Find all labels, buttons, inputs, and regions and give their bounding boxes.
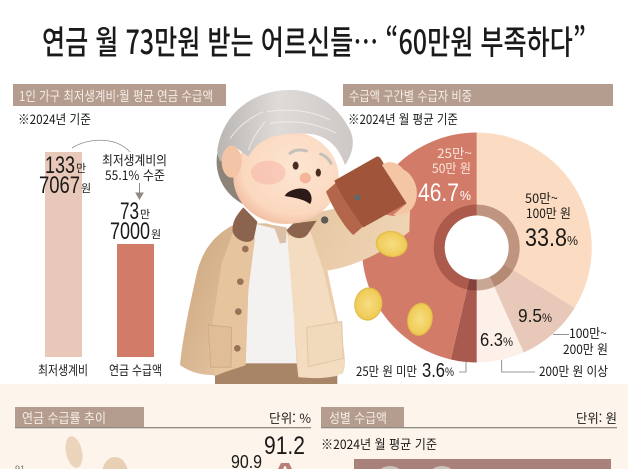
note: 2024 monthly average: ※2024년 월 평균 기준: [321, 434, 437, 453]
heading: by gender: 성별 수급액: [329, 407, 387, 427]
label: under 25 bracket 3.6%: %: [445, 365, 454, 379]
unit label: 단위: 원: [576, 408, 617, 427]
label: 25-50 46.7%: %: [460, 188, 471, 203]
jacket snap: [321, 216, 328, 224]
coin: [374, 228, 410, 260]
wallet back flap: [326, 183, 367, 235]
hair strands: [230, 110, 337, 150]
icon: elderly person holding an empty wallet: [180, 90, 436, 384]
label: under 25 bracket 3.6%: 3.6: [422, 360, 445, 382]
label: 100-200 bracket: 200만 원: [563, 339, 608, 358]
icon: person head: [377, 466, 403, 469]
panel: share of recipients by amount: [343, 84, 613, 382]
value: 133만 7067원: 133: [45, 152, 75, 179]
heading: living cost vs pension: 1인 가구 최저생계비·월 평균 연금 수급액: [19, 85, 213, 105]
wallet front: [334, 157, 407, 227]
nose: [300, 173, 311, 183]
callout: 55.1 percent of living cost: [102, 150, 167, 184]
value: 73만 7000원: 73: [120, 198, 139, 225]
cheek: [251, 161, 286, 185]
pants: [215, 360, 337, 384]
label: 9.5%: %: [542, 311, 552, 325]
buttons: [234, 246, 249, 352]
heading: share by bracket: [343, 84, 613, 106]
panel: living cost vs pension bar chart: [13, 84, 226, 379]
label: 6.3%: 6.3: [480, 330, 503, 350]
label: 50-100 33.8%: [525, 188, 578, 252]
label: 25-50 46.7%: 25만~: [437, 143, 472, 162]
value: 133만 7067원: [39, 152, 91, 199]
ear: [222, 146, 242, 178]
bottom cream background: [0, 384, 628, 469]
note: 2024 basis: ※2024년 기준: [18, 109, 91, 128]
jacket front right: [287, 225, 344, 378]
value: 133만 7067원: 원: [81, 180, 91, 196]
heading: trend: 연금 수급률 추이: [22, 407, 106, 427]
label: 50-100 33.8%: 33.8: [525, 224, 567, 252]
panel: pension receipt rate trend: [15, 407, 311, 469]
bar: minimum living cost: [45, 152, 82, 357]
label: 25-50 46.7%: 46.7: [418, 179, 459, 207]
label: 50-100 33.8%: %: [567, 233, 578, 248]
label: over 200 bracket: [502, 360, 608, 380]
panel: amount by gender: [321, 407, 617, 469]
mouth: [285, 189, 312, 204]
label: 50-100 33.8%: 100만 원: [526, 203, 571, 222]
faded coin: [63, 435, 85, 469]
label: 100-200 bracket: [553, 323, 608, 358]
value: 73만 7000원: 원: [151, 226, 161, 242]
value: 133만 7067원: 만: [76, 160, 86, 176]
icon: person head: [429, 466, 455, 469]
label: 25-50 46.7%: [418, 143, 472, 207]
eyes: [293, 162, 321, 177]
data marker: [278, 463, 292, 469]
gender bar: [354, 459, 611, 469]
label: 100-200 bracket: 100만~: [569, 323, 607, 342]
callout: 55.1 percent of living cost: 최저생계비의: [102, 150, 167, 169]
hand: [382, 162, 417, 215]
white shirt: [246, 223, 297, 363]
arrow: down to pension bar: [136, 183, 143, 199]
value: 73만 7000원: 만: [140, 206, 150, 222]
label: 6.3%: %: [503, 335, 513, 349]
label: 25-50 46.7%: 50만 원: [432, 158, 471, 177]
bar: pension amount: [117, 244, 154, 357]
value 91.2: 91.2: [264, 432, 305, 460]
value: 133만 7067원: 7067: [39, 172, 80, 199]
label: under 25 bracket 3.6%: 25만 원 미만: [356, 361, 417, 380]
unit label: 단위: %: [269, 408, 311, 427]
heading: share by bracket: 수급액 구간별 수급자 비중: [349, 85, 472, 105]
faded coin: [102, 457, 128, 469]
coin: [404, 300, 436, 338]
coin: [352, 285, 385, 323]
label: over 200 bracket: 200만 원 이상: [539, 361, 608, 380]
donut chart: [362, 132, 592, 363]
value: 73만 7000원: [110, 198, 161, 245]
wallet snap: [354, 194, 360, 200]
eyebrows: [290, 150, 331, 163]
label: 9.5%: 9.5: [518, 306, 542, 326]
label: under 25 bracket 3.6%: [356, 360, 466, 382]
callout: 55.1 percent of living cost: 55.1% 수준: [105, 165, 165, 184]
arrow: curved connector: [72, 140, 130, 152]
label: pension amount: 연금 수급액: [109, 360, 162, 379]
value: 73만 7000원: 7000: [110, 218, 150, 245]
label: minimum living cost: 최저생계비: [38, 360, 88, 379]
label: 50-100 33.8%: 50만~: [525, 188, 558, 207]
jacket body and sleeve: [180, 207, 410, 378]
collar: [233, 207, 317, 243]
hair top: [217, 90, 353, 165]
note: 2024 monthly average: ※2024년 월 평균 기준: [348, 109, 458, 128]
jacket front left: [208, 232, 255, 375]
face: [233, 131, 339, 224]
hair back: [217, 143, 245, 205]
heading: trend: [15, 407, 144, 428]
pockets: [208, 322, 343, 367]
